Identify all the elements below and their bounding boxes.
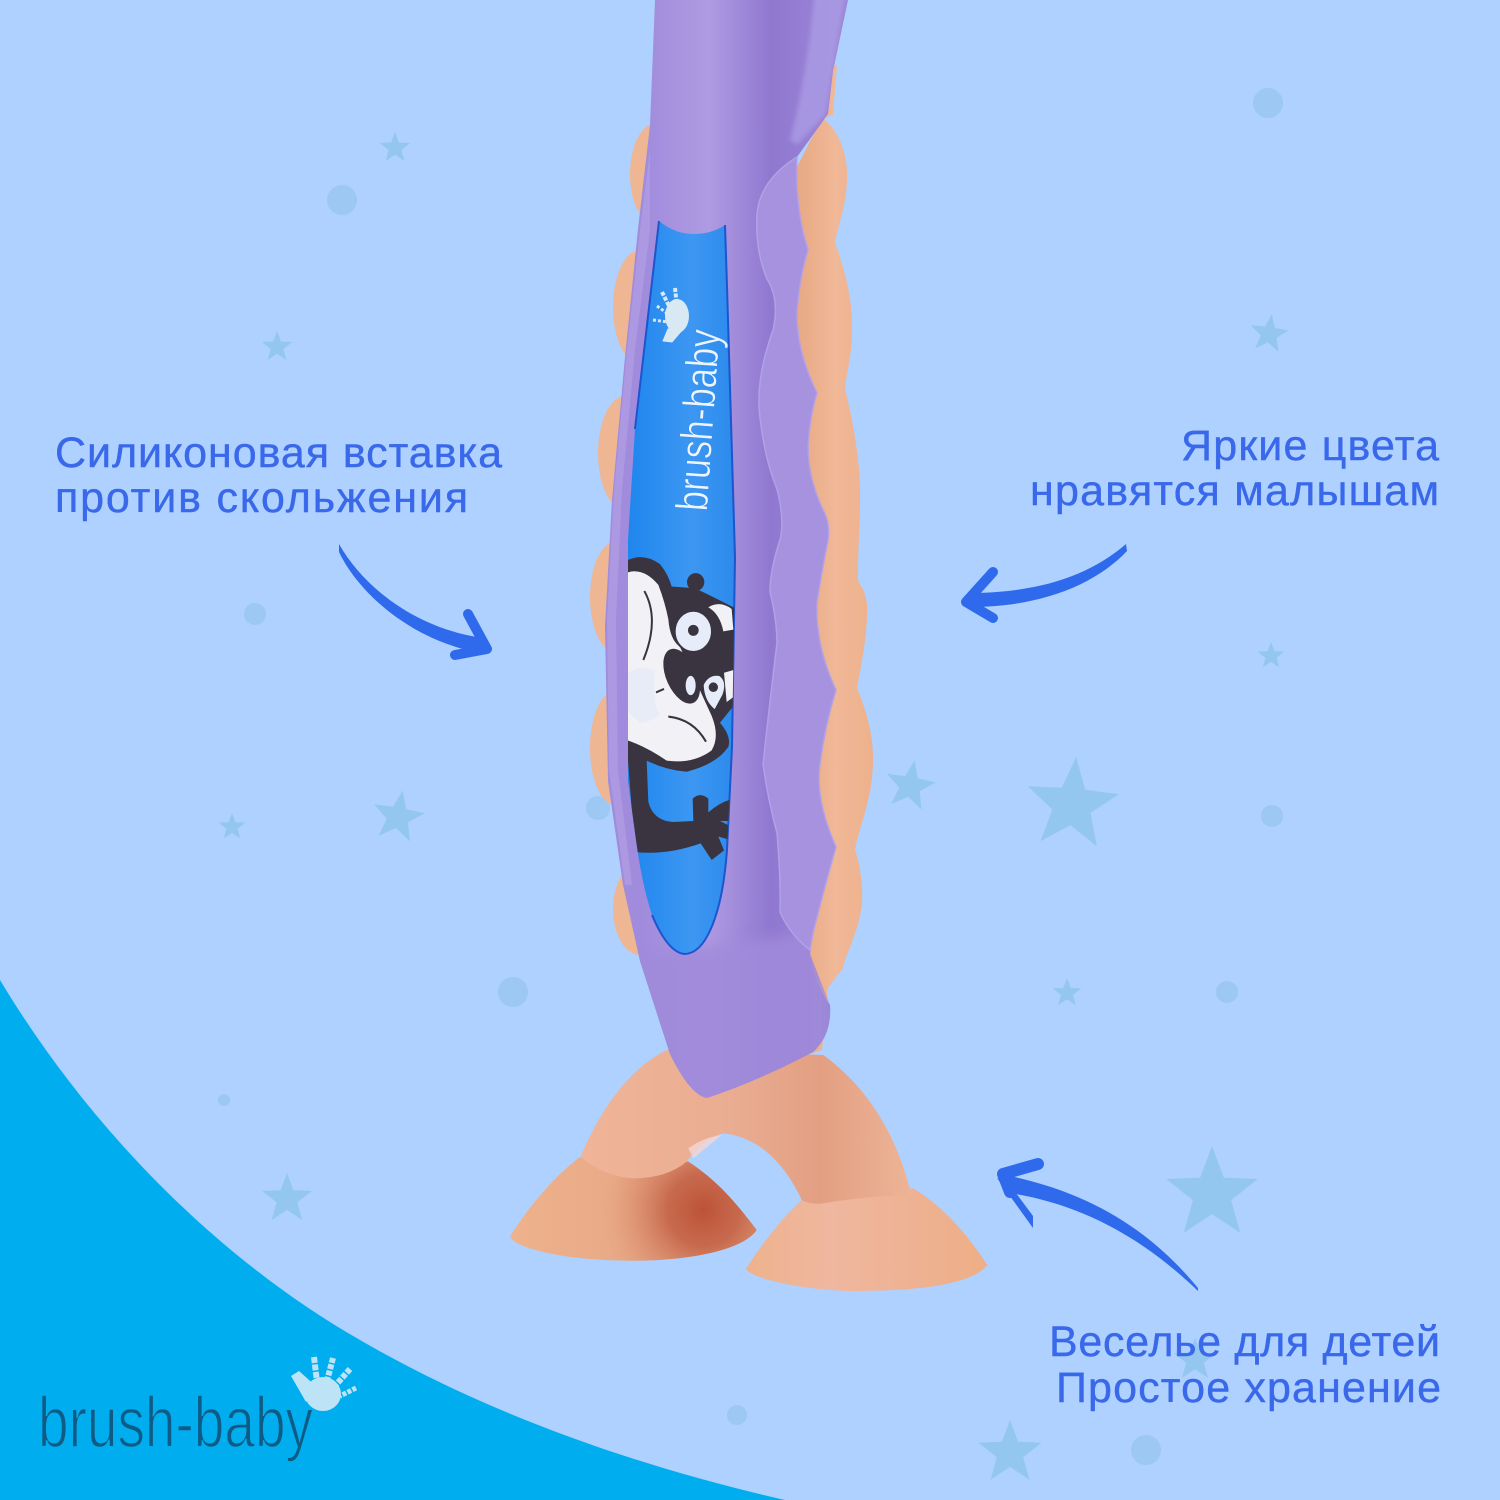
arrow: silicone insert — [339, 544, 487, 655]
callout: fun and storage: Веселье для детей — [1049, 1318, 1440, 1366]
callout: silicone insert — [55, 429, 502, 522]
callout: bright colours: нравятся малышам — [1030, 467, 1439, 515]
purple handle body — [605, 0, 848, 1098]
suction feet arch — [510, 1049, 987, 1291]
toothbrush handle — [510, 0, 987, 1291]
arrow: fun and storage — [997, 1164, 1198, 1291]
cartoon skunk — [627, 557, 737, 860]
icon: logo handprint — [291, 1357, 356, 1411]
left suction cup — [510, 1157, 757, 1261]
left silicone beads — [590, 123, 682, 955]
blue label panel — [628, 221, 735, 954]
callout: bright colours: Яркие цвета — [1181, 422, 1439, 470]
arrow: bright colours — [966, 544, 1127, 618]
callout: silicone insert: против скольжения — [55, 474, 468, 522]
icon: handle handprint — [653, 288, 689, 342]
logo: brush-baby: brush-baby — [38, 1384, 313, 1463]
callout: silicone insert: Силиконовая вставка — [55, 429, 502, 477]
handle shading — [600, 0, 846, 1110]
light grip insert — [757, 157, 836, 950]
callout: fun and storage: Простое хранение — [1056, 1364, 1441, 1412]
background stars and dots — [218, 88, 1291, 1480]
arch — [581, 1049, 912, 1204]
logo: brush-baby — [38, 1357, 356, 1463]
callout: fun and storage — [1049, 1318, 1441, 1412]
blue corner wave — [0, 980, 785, 1500]
callout: bright colours — [1030, 422, 1439, 515]
right silicone strip — [780, 65, 873, 1060]
right suction cup — [746, 1188, 987, 1291]
handle brand text: brush-baby — [666, 327, 730, 513]
